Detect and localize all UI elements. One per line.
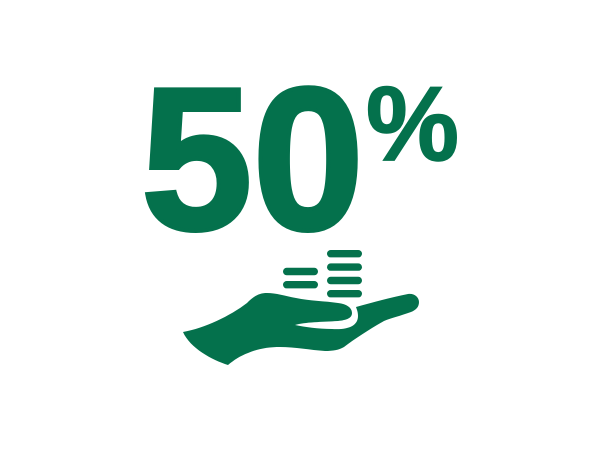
icon: coin stacks <box>283 250 362 297</box>
icon: open hand <box>183 293 419 365</box>
figure: 50: 50 <box>141 46 364 273</box>
icon: hand holding coins <box>183 250 419 365</box>
percent sign: % <box>366 65 459 183</box>
